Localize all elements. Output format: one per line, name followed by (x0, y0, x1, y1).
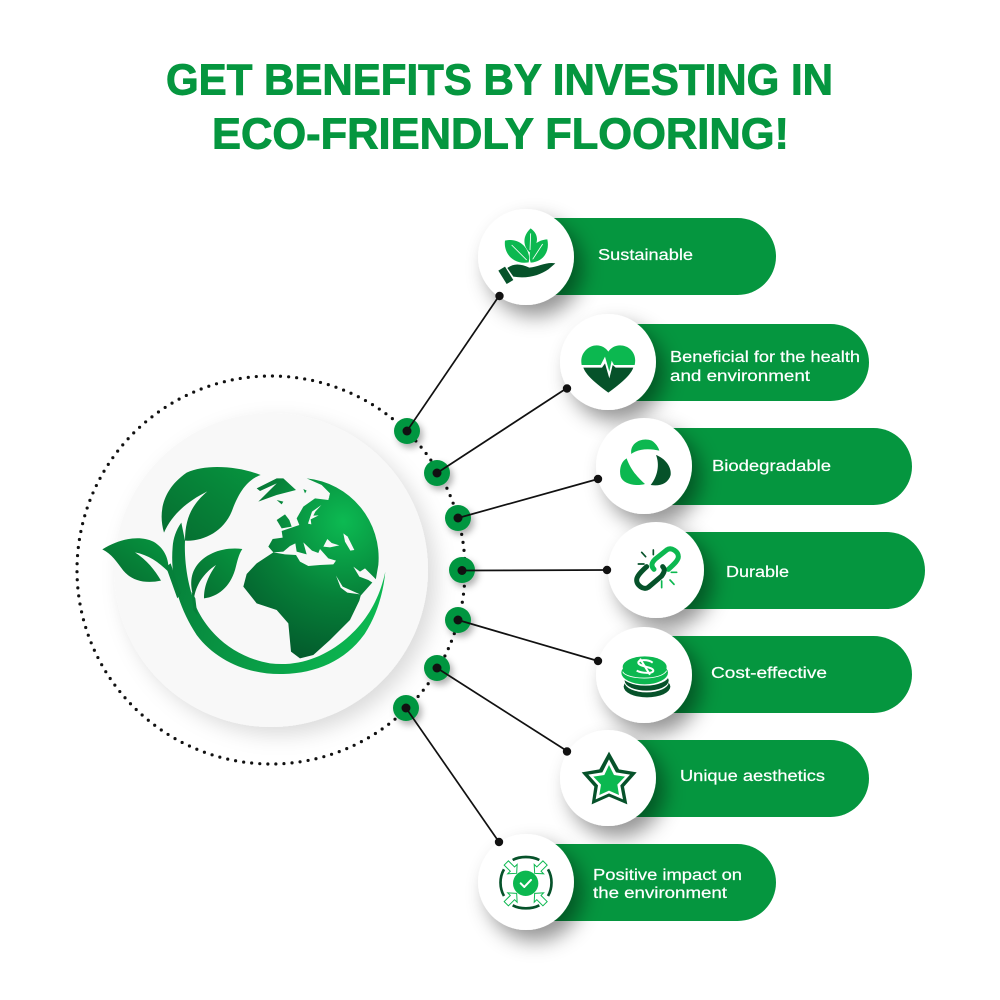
connector: Sustainable (394, 292, 504, 444)
icon disc (596, 418, 692, 514)
bar (656, 532, 925, 609)
label: Biodegradable (712, 458, 831, 475)
label: Positive impact on (593, 867, 742, 884)
label: Beneficial for the health (670, 349, 860, 366)
small leaf (191, 549, 242, 598)
benefit: Cost-effective (596, 627, 912, 723)
benefit: Beneficial for the health and environment (560, 314, 869, 410)
label: Sustainable (598, 247, 693, 264)
leaf branches (166, 563, 197, 615)
dotted orbit ring (77, 376, 465, 764)
label: Durable (726, 564, 789, 581)
icon disc (596, 627, 692, 723)
icon disc (608, 522, 704, 618)
connector: Durable (449, 557, 611, 583)
label: Unique aesthetics (680, 768, 825, 785)
benefit: Durable (608, 522, 925, 618)
bar (526, 218, 776, 295)
benefit: Unique aesthetics (560, 730, 869, 826)
icon: broken chain link (637, 549, 678, 588)
connector lines with nodes (393, 292, 611, 846)
label (670, 349, 860, 385)
label (593, 867, 742, 902)
benefit: Positive impact on the environment (478, 834, 776, 930)
bar (644, 636, 912, 713)
icon: heart with pulse (581, 345, 635, 393)
icon disc (560, 314, 656, 410)
bar (607, 324, 869, 401)
title: GET BENEFITS BY INVESTING IN (166, 56, 833, 104)
icon: recycling leaves (620, 439, 671, 485)
label: and environment (670, 368, 811, 385)
bar (607, 740, 869, 817)
globe land: Eurasia and Africa (243, 478, 379, 658)
seas cut from the land (273, 490, 377, 594)
icon disc (478, 209, 574, 305)
title: ECO-FRIENDLY FLOORING! (212, 110, 789, 158)
icon disc (560, 730, 656, 826)
icon disc (478, 834, 574, 930)
connector: Unique aesthetics (424, 655, 571, 756)
icon: check with inward arrows (500, 857, 551, 908)
benefit: Sustainable (478, 209, 776, 305)
label: Cost-effective (711, 665, 827, 682)
large leaf (162, 467, 261, 541)
benefit: Biodegradable (596, 418, 912, 514)
label: the environment (593, 885, 728, 902)
connector: Positive impact (393, 695, 503, 846)
connector: Cost-effective (445, 607, 602, 665)
icon: hand holding leaves (498, 228, 555, 284)
title (166, 56, 833, 158)
connector: Biodegradable (445, 475, 602, 531)
central disc (114, 413, 428, 727)
swoosh stem ring (172, 523, 385, 674)
connector: Beneficial (424, 384, 571, 486)
globe and leaves emblem (102, 467, 385, 674)
Greenland and islands (257, 478, 307, 528)
bar (526, 844, 776, 921)
bar (644, 428, 912, 505)
icon: star (582, 752, 637, 804)
left leaf (102, 538, 168, 582)
icon: stack of coins (621, 656, 670, 697)
